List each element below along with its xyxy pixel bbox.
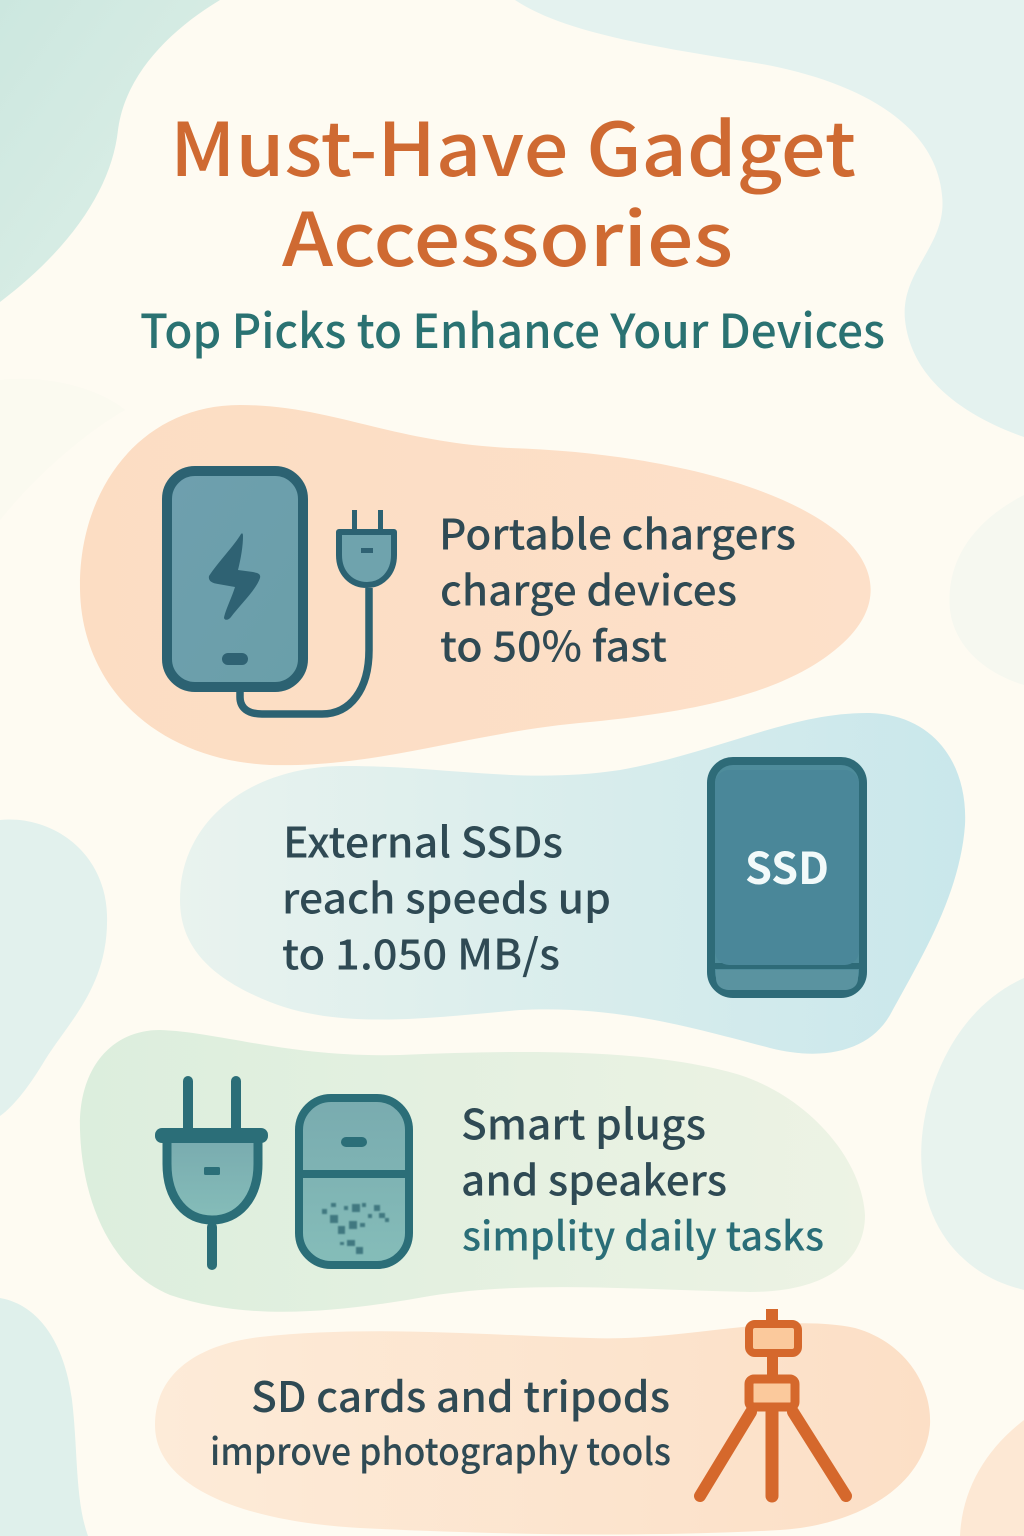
text: smart plugs and speakers: simplity daily tasks xyxy=(462,1204,824,1262)
text: external SSDs: to 1.050 MB/s xyxy=(282,922,560,982)
title: Accessories xyxy=(282,181,733,288)
text: external SSDs: reach speeds up xyxy=(282,866,611,926)
title: Must-Have Gadget xyxy=(170,91,856,198)
text: smart plugs and speakers: Smart plugs xyxy=(461,1092,706,1152)
icon: tripod xyxy=(700,1309,846,1496)
panel: SD cards and tripods xyxy=(155,1309,930,1534)
text: smart plugs and speakers: and speakers xyxy=(461,1148,727,1208)
title xyxy=(170,91,856,288)
text: portable chargers: Portable chargers xyxy=(439,502,796,562)
text: SD cards and tripods: SD cards and tripods xyxy=(251,1364,670,1425)
text: portable chargers xyxy=(439,502,796,674)
text: portable chargers: charge devices xyxy=(440,558,737,618)
panel: smart plugs and speakers xyxy=(80,1030,865,1312)
subtitle: Top Picks to Enhance Your Devices xyxy=(140,293,885,362)
text: smart plugs and speakers xyxy=(461,1092,824,1262)
text: portable chargers: to 50% fast xyxy=(440,614,667,674)
panel: external SSDs xyxy=(180,713,965,1054)
icon: power bank with plug xyxy=(167,471,394,714)
text: SD cards and tripods xyxy=(210,1364,671,1476)
icon: plug xyxy=(155,1076,268,1270)
icon: smart speaker xyxy=(299,1098,409,1265)
panel: portable chargers xyxy=(80,405,871,765)
icon: SSD drive xyxy=(711,761,863,994)
text: SD cards and tripods: improve photography tools xyxy=(210,1422,671,1476)
icon: SSD drive: SSD xyxy=(745,833,829,897)
text: external SSDs xyxy=(282,810,611,982)
text: external SSDs: External SSDs xyxy=(283,810,563,870)
